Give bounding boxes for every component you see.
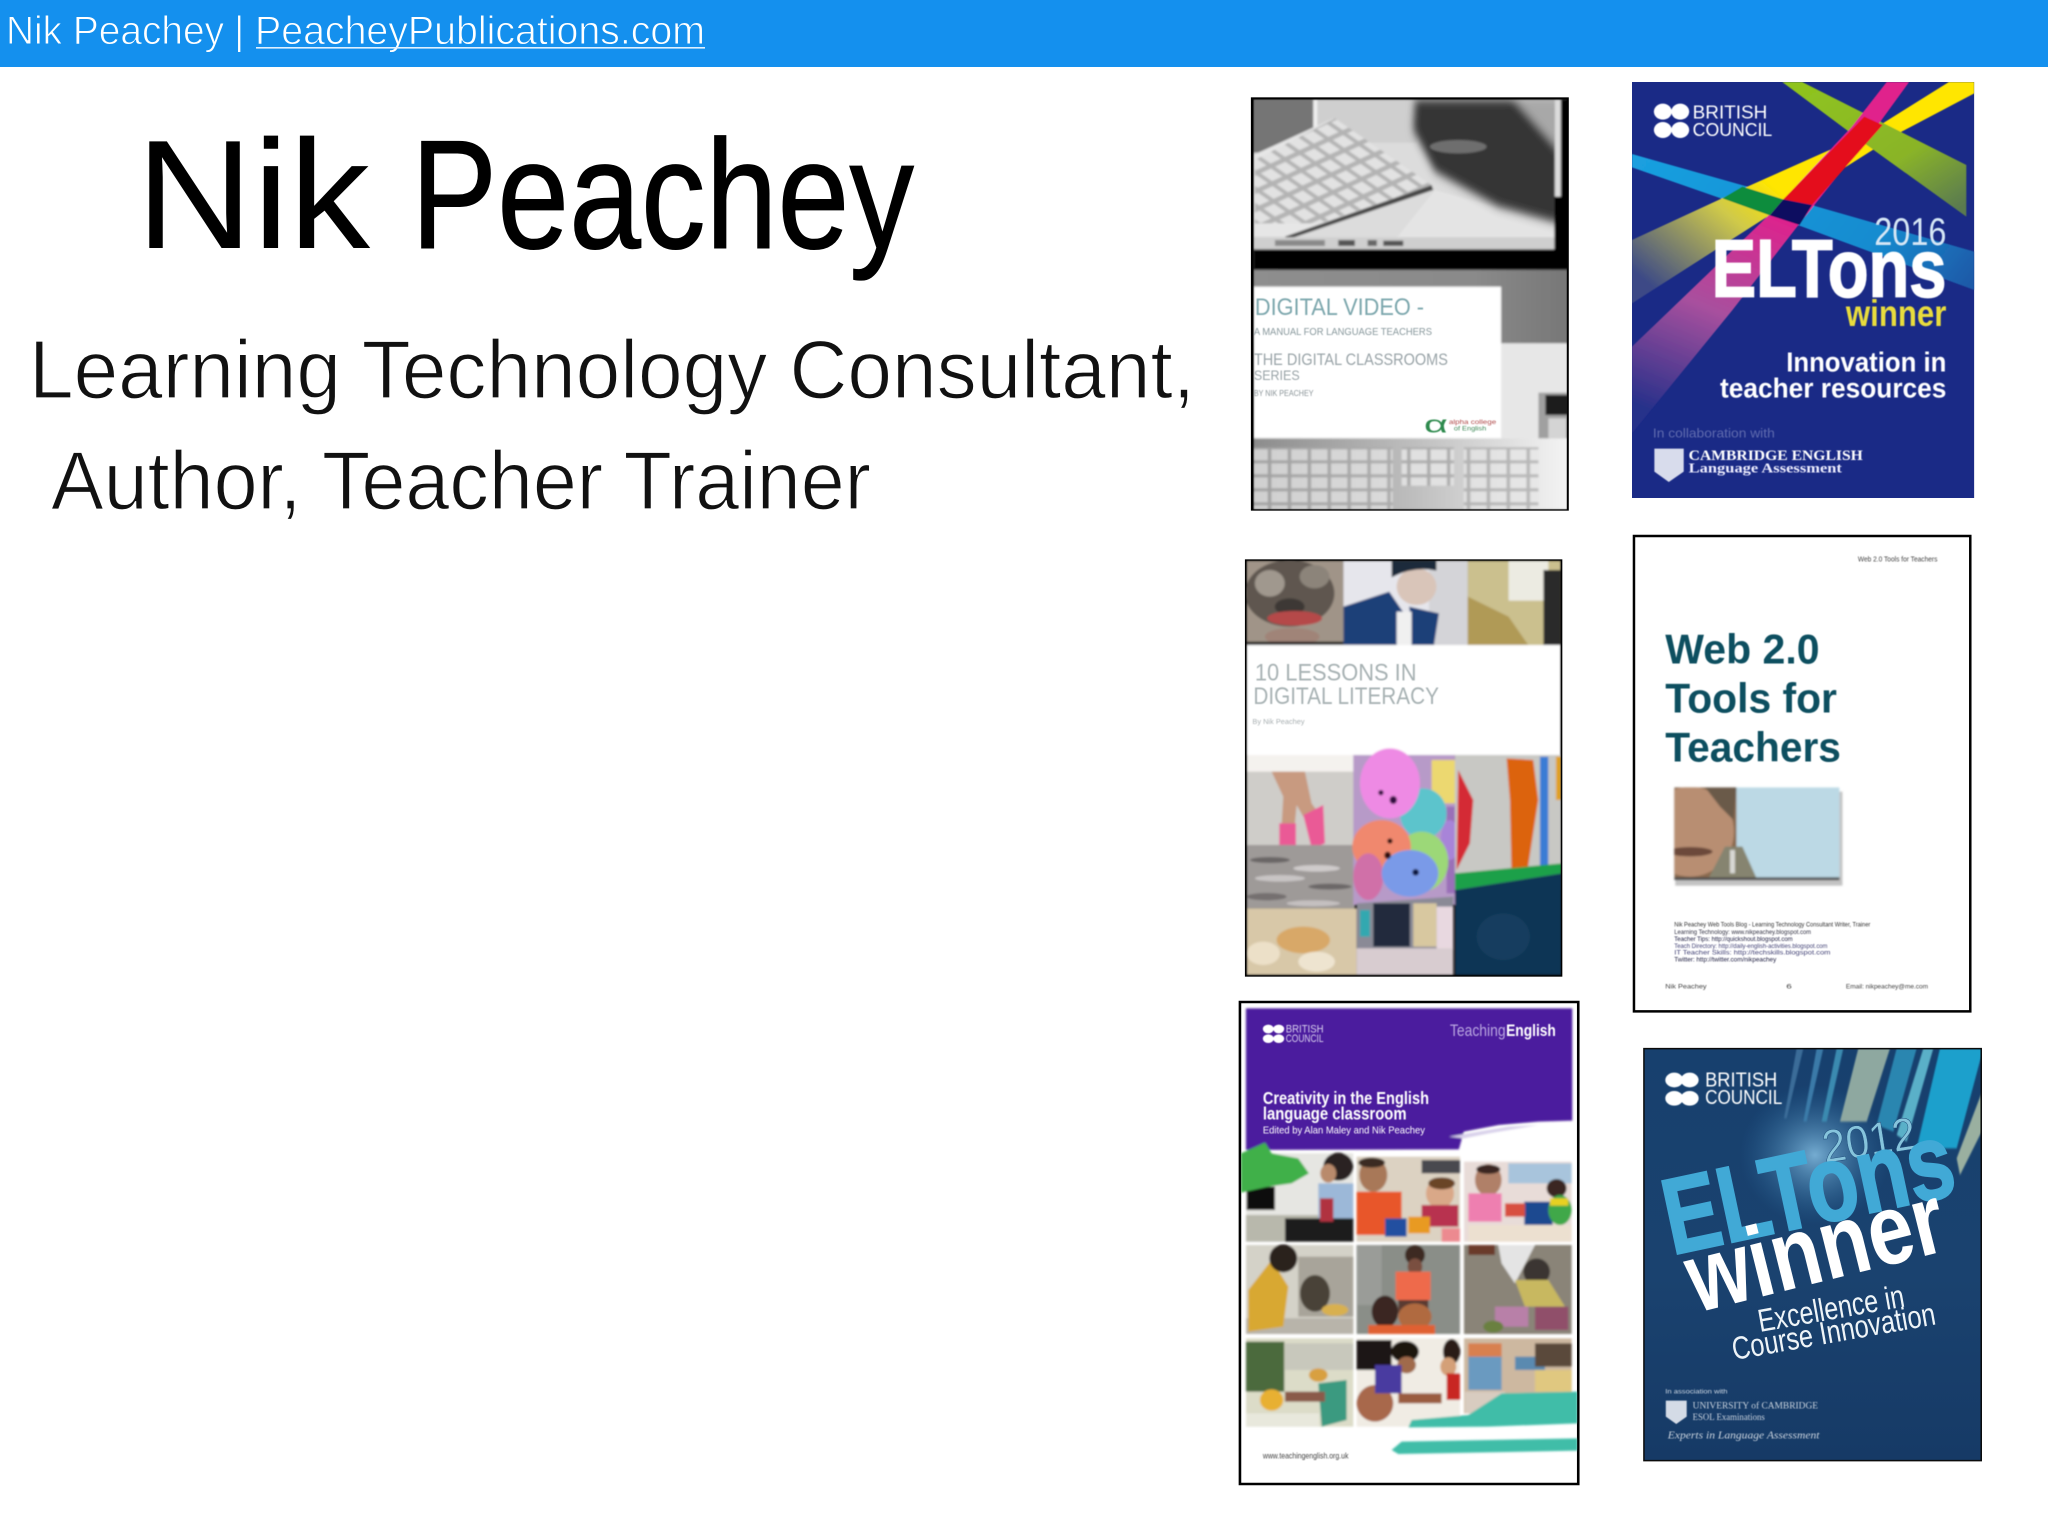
book cover: 10 Lessons in Digital Literacy	[1245, 559, 1562, 977]
author details: 6	[1786, 982, 1792, 990]
blue stripes	[1784, 1048, 1983, 1175]
award year: 2016	[1874, 210, 1946, 254]
cover title line 2: Tools for	[1665, 676, 1837, 722]
winner label: winner	[1845, 293, 1946, 334]
award year: 2012	[1818, 1107, 1919, 1173]
British Council logo	[1664, 1072, 1782, 1106]
cover title line 2: language classroom	[1263, 1104, 1407, 1123]
title	[136, 108, 914, 281]
author details: Twitter: http://twitter.com/nikpeachey	[1674, 956, 1776, 963]
cover author: BY NIK PEACHEY	[1254, 390, 1314, 398]
author details: Email: nikpeachey@me.com	[1846, 982, 1928, 990]
book cover: ELTons 2016 winner	[1632, 82, 1974, 498]
publisher logo: alpha college	[1449, 418, 1496, 426]
collaboration note: In collaboration with	[1653, 427, 1775, 441]
header link: PeacheyPublications.com	[255, 9, 705, 53]
author details	[1665, 921, 1928, 990]
cover subtitle: manual: A MANUAL FOR LANGUAGE TEACHERS	[1254, 326, 1432, 337]
header separator: |	[234, 9, 244, 53]
author details: Teacher Tips: http://quickshout.blogspot.com	[1674, 935, 1793, 943]
ELTons wordmark: ELTons	[1652, 1098, 1964, 1277]
subtitle	[29, 323, 1195, 527]
cover title line 2: DIGITAL LITERACY	[1253, 683, 1439, 710]
header bar	[0, 0, 2048, 67]
author details: Nik Peachey Web Tools Blog - Learning Technology Consultant Writer, Trainer	[1674, 921, 1871, 928]
British Council logo	[1263, 1023, 1324, 1045]
British Council logo: COUNCIL	[1705, 1087, 1782, 1109]
running header: Web 2.0 Tools for Teachers	[1858, 555, 1938, 563]
title: Peachey	[411, 108, 914, 281]
publisher logo	[1424, 418, 1496, 434]
Cambridge crest	[1666, 1401, 1687, 1424]
British Council logo: BRITISH	[1693, 103, 1767, 123]
book cover: Creativity in the English language classroom: COUNCIL	[1286, 1033, 1324, 1045]
publisher logo: α	[1424, 411, 1448, 438]
author details: Learning Technology: www.nikpeachey.blogspot.com	[1674, 928, 1811, 936]
cover editors: Edited by Alan Maley and Nik Peachey	[1263, 1125, 1426, 1136]
Cambridge crest	[1654, 449, 1684, 482]
ESOL Examinations text: ESOL Examinations	[1693, 1411, 1765, 1422]
author details: Nik Peachey	[1665, 982, 1707, 990]
award category line 2: Course Innovation	[1729, 1296, 1938, 1367]
winner label: winner	[1673, 1162, 1956, 1335]
title: Nik	[136, 108, 371, 281]
book cover: Web 2.0 Tools for Teachers	[1634, 536, 1970, 1011]
association note: In association with	[1665, 1387, 1728, 1395]
British Council logo: BRITISH	[1286, 1023, 1324, 1036]
Cambridge English text: CAMBRIDGE ENGLISH	[1689, 447, 1863, 464]
photo grid, coordinates follow the nine-photo collage	[1241, 1143, 1578, 1454]
cover series line 2: SERIES	[1254, 367, 1300, 383]
author details: Teach Directory: http://daily-english-activities.blogspot.com	[1674, 942, 1827, 950]
tagline: Experts in Language Assessment	[1667, 1430, 1820, 1441]
light glow	[1752, 1096, 1878, 1214]
author photo	[1672, 786, 1844, 887]
book cover: Creativity in the English language classroom	[1240, 1002, 1578, 1484]
subtitle: Author, Teacher Trainer	[51, 434, 871, 527]
cover title line 1: Creativity in the English	[1263, 1088, 1429, 1108]
header author name: Nik Peachey	[6, 9, 224, 53]
cover website: www.teachingenglish.org.uk	[1262, 1452, 1349, 1461]
publisher logo: of English	[1454, 424, 1486, 432]
British Council logo: COUNCIL	[1693, 120, 1772, 141]
cover series name: THE DIGITAL CLASSROOMS	[1254, 351, 1448, 369]
award category: Innovation in	[1786, 348, 1946, 378]
University of Cambridge text: UNIVERSITY of CAMBRIDGE	[1693, 1400, 1818, 1411]
cover author: By Nik Peachey	[1252, 718, 1305, 726]
book cover: Digital Video	[1251, 97, 1570, 511]
award category: Excellence in	[1755, 1278, 1907, 1339]
lower-left, centre and right photos, coordinates follow the balloon image	[1247, 748, 1562, 975]
top photo, coordinates follow the keyboard-and-hand image	[1253, 97, 1565, 249]
book cover: ELTons 2012 winner	[1644, 1048, 1983, 1461]
TeachingEnglish brand: English	[1506, 1022, 1556, 1040]
TeachingEnglish brand: Teaching	[1450, 1022, 1506, 1040]
cover title line 3: Teachers	[1665, 725, 1841, 771]
author details: IT Teacher Skills: http://techskills.blogspot.com	[1674, 949, 1830, 956]
Language Assessment text: Language Assessment	[1689, 461, 1842, 476]
cover title: Digital Video: DIGITAL VIDEO -	[1255, 294, 1424, 321]
cover title line 1: 10 LESSONS IN	[1255, 659, 1417, 686]
subtitle: Learning Technology Consultant,	[29, 323, 1195, 416]
British Council logo: BRITISH	[1705, 1069, 1777, 1091]
British Council logo	[1654, 103, 1772, 141]
cover title line 1: Web 2.0	[1665, 626, 1820, 673]
